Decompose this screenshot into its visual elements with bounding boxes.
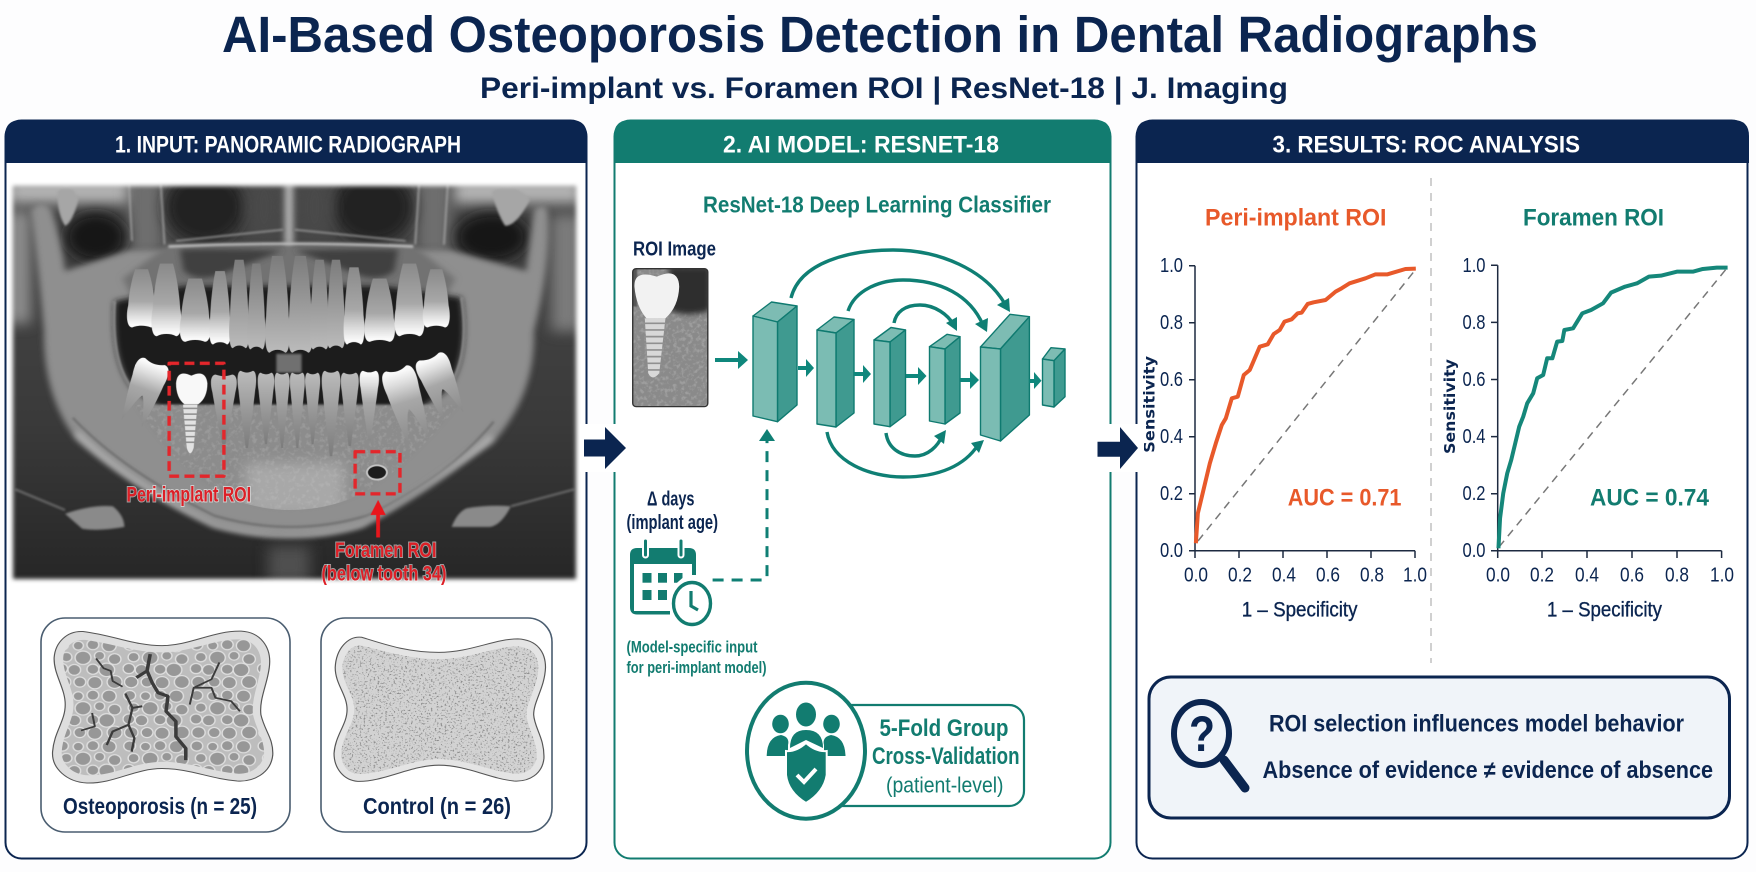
panel header: input: 1. INPUT: PANORAMIC RADIOGRAPH <box>115 132 461 158</box>
model heading: ResNet-18 Deep Learning Classifier <box>703 192 1051 218</box>
label: control: Control (n = 26) <box>363 793 511 819</box>
chart: foramen ROC: 1 – Specificity <box>1547 598 1662 622</box>
skip connections <box>791 250 1005 477</box>
chart: peri-implant ROC: 0.6 <box>1316 564 1340 586</box>
foramen <box>367 465 387 480</box>
mandible <box>31 203 548 535</box>
heading: foramen: Foramen ROI <box>1523 204 1664 232</box>
implant <box>176 373 207 404</box>
panoramic radiograph image <box>8 171 582 587</box>
chart: foramen ROC: 0.4 <box>1575 564 1599 586</box>
badge text <box>872 715 1020 798</box>
chart: peri-implant ROC: 0.8 <box>1360 564 1384 586</box>
chart: foramen ROC: 0.8 <box>1665 564 1689 586</box>
delta days label: (implant age) <box>626 512 718 534</box>
delta days label: Δ days <box>647 488 694 510</box>
badge text: Cross-Validation <box>872 743 1020 770</box>
icon: magnifier with question mark <box>1174 702 1245 788</box>
callout <box>1149 677 1730 818</box>
ROI labels <box>126 484 446 586</box>
title: AI-Based Osteoporosis Detection in Dental Radiographs <box>222 6 1538 63</box>
bone: osteoporosis <box>53 631 273 783</box>
callout text: Absence of evidence ≠ evidence of absence <box>1262 757 1713 784</box>
delta days label <box>626 488 718 534</box>
ROI boxes <box>169 363 400 494</box>
ROI labels: (below tooth 34) <box>322 562 446 586</box>
label: osteoporosis: Osteoporosis (n = 25) <box>63 793 257 819</box>
ResNet block diagram <box>715 250 1065 477</box>
chart: peri-implant ROC: 0.0 <box>1184 564 1208 586</box>
AUC peri-implant: AUC = 0.71 <box>1288 484 1402 512</box>
chart: peri-implant ROC: 0.2 <box>1160 483 1183 505</box>
lower teeth <box>126 357 169 415</box>
icon: calendar with clock <box>630 541 710 624</box>
panel header: results <box>1136 120 1749 163</box>
maxilla <box>122 245 455 301</box>
chart: foramen ROC: 0.0 <box>1486 564 1510 586</box>
badge text: 5-Fold Group <box>880 715 1008 742</box>
callout text <box>1262 710 1713 784</box>
bone: control <box>332 637 547 782</box>
block 5 <box>980 314 1029 441</box>
model-specific note: for peri-implant model) <box>626 658 766 677</box>
ROI image label: ROI Image <box>633 238 716 260</box>
chart: foramen ROC <box>1441 255 1734 622</box>
chart: peri-implant ROC: 0.4 <box>1272 564 1296 586</box>
alveolar bone <box>153 403 432 412</box>
foramen arrow <box>370 500 386 537</box>
chart: foramen ROC: 1.0 <box>1710 564 1734 586</box>
badge text: (patient-level) <box>886 772 1004 798</box>
mouth gap <box>114 286 464 408</box>
block 3 <box>874 328 906 427</box>
subtitle: Peri-implant vs. Foramen ROI | ResNet-18 | J. Imaging <box>480 72 1288 105</box>
chart: foramen ROC: 0.6 <box>1620 564 1644 586</box>
chart: peri-implant ROC: 1.0 <box>1403 564 1427 586</box>
heading: peri-implant: Peri-implant ROI <box>1205 204 1386 232</box>
arrow: model to results <box>1098 424 1144 472</box>
upper teeth <box>127 269 156 327</box>
chart: foramen ROC: Sensitivity <box>1441 359 1459 454</box>
ROI image <box>631 267 710 407</box>
hyoid shapes <box>65 506 124 530</box>
chart: foramen ROC: 0.6 <box>1462 369 1486 391</box>
cross-validation badge <box>747 683 1024 819</box>
chart: foramen ROC: 1.0 <box>1462 255 1486 277</box>
chart: peri-implant ROC: 0.6 <box>1160 369 1183 391</box>
dashed input connector <box>713 429 775 580</box>
chart: peri-implant ROC: Sensitivity <box>1140 356 1158 453</box>
chart: peri-implant ROC: 0.0 <box>1160 540 1183 562</box>
chart: peri-implant ROC: 0.8 <box>1160 312 1183 334</box>
block 2 <box>817 317 854 427</box>
chart: peri-implant ROC: 0.4 <box>1160 426 1183 448</box>
model-specific note <box>626 638 766 677</box>
ROI labels: Peri-implant ROI <box>126 484 251 506</box>
chart: peri-implant ROC: 1.0 <box>1160 255 1183 277</box>
flow arrows <box>715 351 1042 389</box>
chart: peri-implant ROC <box>1140 255 1427 622</box>
card: control <box>321 618 552 832</box>
panel: AI model <box>614 120 1111 858</box>
icon: people and shield <box>767 702 846 803</box>
panel: input <box>5 120 587 858</box>
arrow: input to model <box>580 424 626 472</box>
chart: foramen ROC: 0.2 <box>1530 564 1554 586</box>
callout text: ROI selection influences model behavior <box>1269 710 1684 738</box>
panel header: results: 3. RESULTS: ROC ANALYSIS <box>1272 132 1580 158</box>
chart: peri-implant ROC: 1 – Specificity <box>1242 598 1358 622</box>
chart: foramen ROC: 0.4 <box>1462 426 1486 448</box>
block 1 <box>753 302 797 422</box>
panel header: AI model: 2. AI MODEL: RESNET-18 <box>723 132 999 158</box>
ROI labels: Foramen ROI <box>335 539 436 562</box>
AUC foramen: AUC = 0.74 <box>1590 484 1710 512</box>
card: osteoporosis <box>41 618 290 832</box>
block 6 <box>1042 348 1065 407</box>
block 4 <box>930 334 960 424</box>
chart: foramen ROC: 0.0 <box>1462 540 1486 562</box>
chart: peri-implant ROC: 0.2 <box>1228 564 1252 586</box>
chart: foramen ROC: 0.2 <box>1462 483 1486 505</box>
panel header: input <box>5 120 587 163</box>
panel: results <box>1136 120 1749 858</box>
panel header: AI model <box>614 120 1111 163</box>
chart: foramen ROC: 0.8 <box>1462 312 1486 334</box>
model-specific note: (Model-specific input <box>626 638 758 656</box>
icon: magnifier with question mark: ? <box>1189 706 1215 762</box>
